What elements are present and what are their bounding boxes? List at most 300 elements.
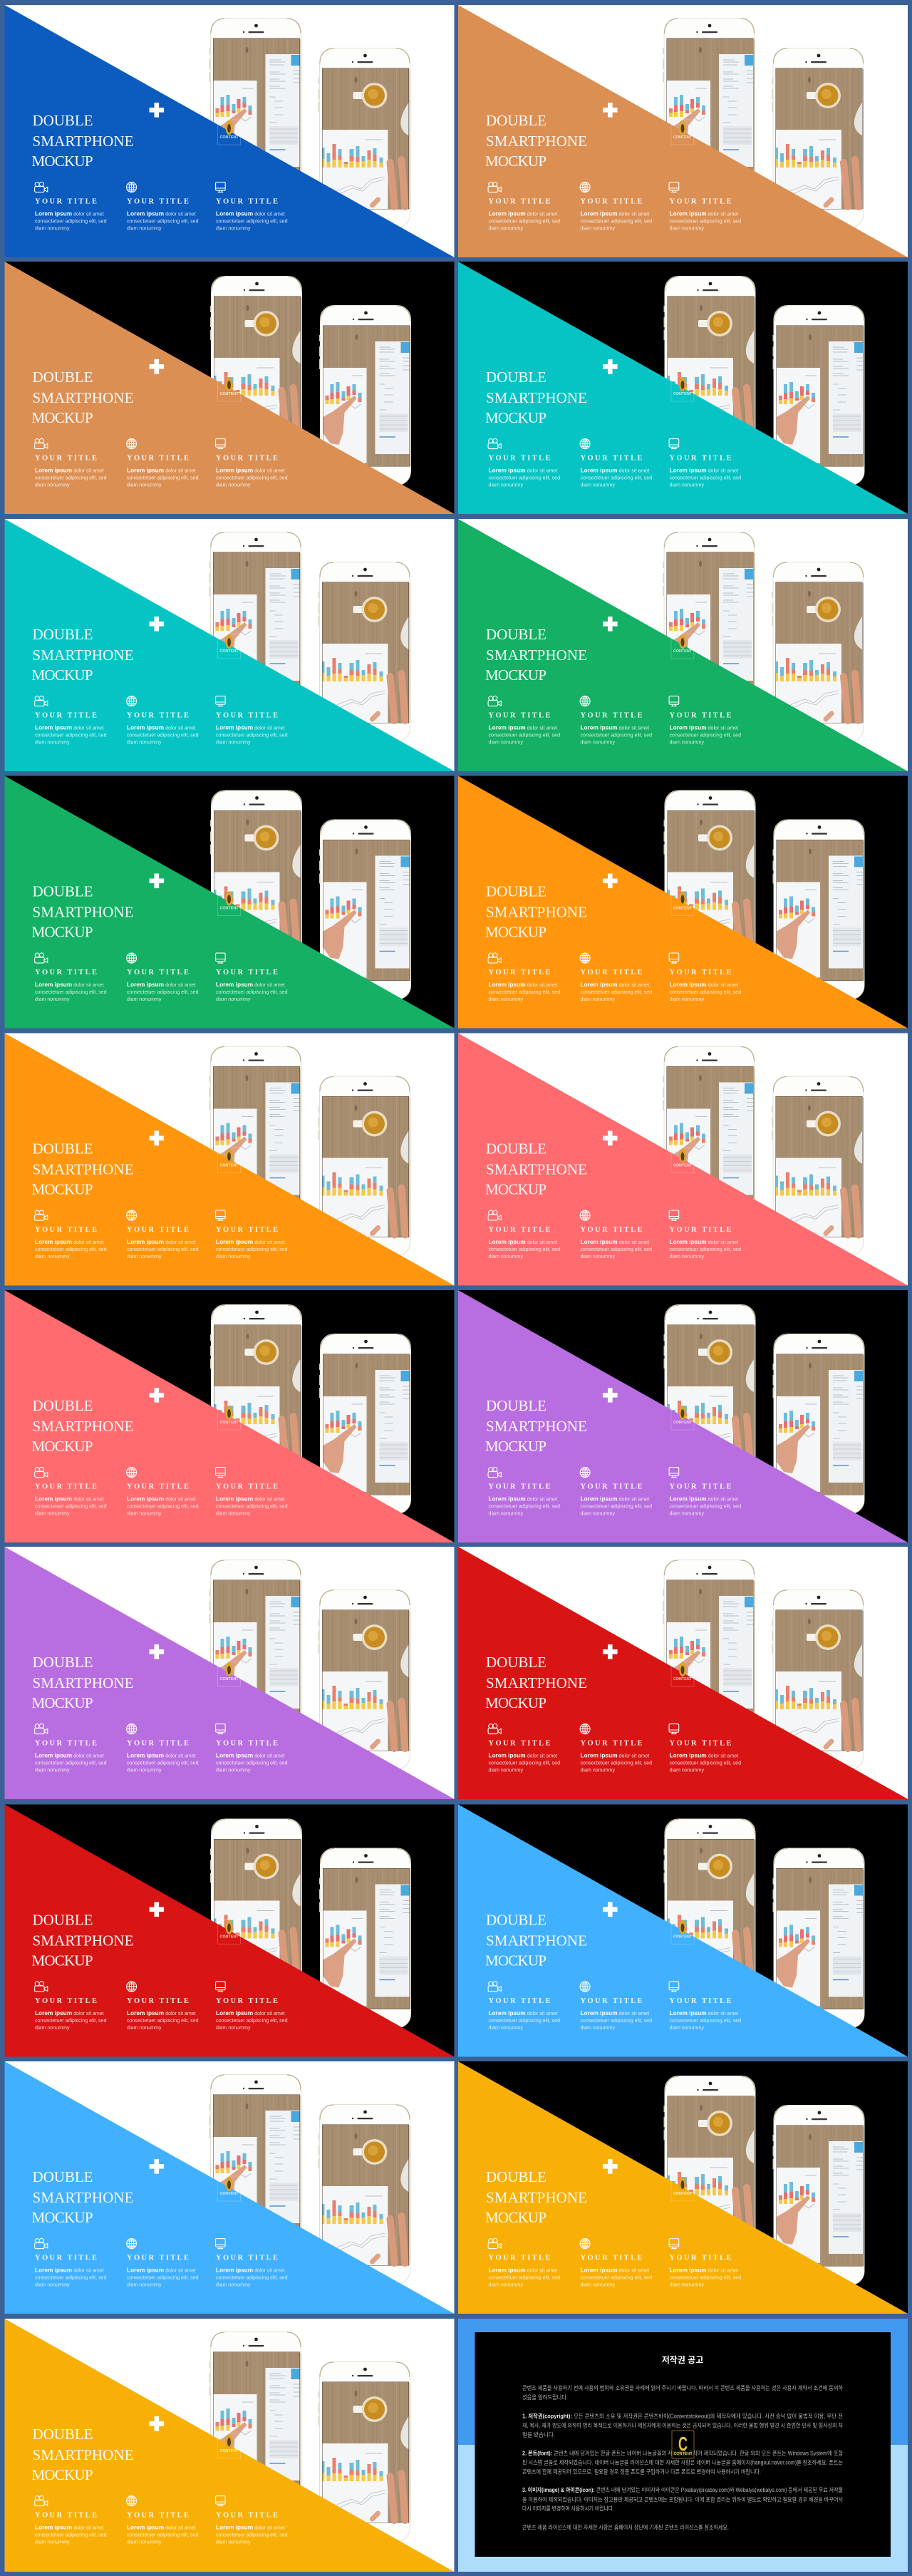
title: SMARTPHONE <box>486 1932 587 1949</box>
feature text: consectetuer adipiscing elit, sed <box>35 989 107 995</box>
icon: plus <box>603 103 618 118</box>
feature title: YOUR TITLE <box>127 1739 190 1748</box>
feature text: Lorem ipsum <box>670 981 707 988</box>
feature title: YOUR TITLE <box>216 2512 279 2519</box>
icon: plus <box>603 1130 618 1145</box>
feature text: dolor sit amet <box>708 211 738 217</box>
feature 1 <box>488 696 560 746</box>
feature text: consectetuer adipiscing elit, sed <box>489 1504 560 1510</box>
notice footer: 콘텐츠 제품 라이선스에 대한 자세한 사항은 홈페이지 상단에 기재된 콘텐츠 라이선스를 참조하세요. <box>522 2523 729 2530</box>
feature text: Lorem ipsum <box>216 2009 253 2016</box>
notice item 3: 다시 이미지를 변경하여 사용하시기 바랍니다. <box>522 2505 614 2512</box>
feature text: consectetuer adipiscing elit, sed <box>580 1504 652 1510</box>
feature text: dolor sit amet <box>165 2011 196 2016</box>
diagonal colour panel <box>458 519 908 771</box>
feature 3 <box>669 696 741 746</box>
watermark logo <box>218 1405 241 1430</box>
icon: globe <box>580 182 590 192</box>
watermark logo <box>218 1919 241 1944</box>
title: DOUBLE <box>33 626 93 643</box>
feature text: Lorem ipsum <box>670 210 707 217</box>
feature text: dolor sit amet <box>527 468 557 473</box>
icon: globe <box>127 1468 137 1478</box>
feature text: dolor sit amet <box>619 726 649 731</box>
diagonal colour panel <box>4 1290 455 1542</box>
feature text: dolor sit amet <box>73 1497 104 1503</box>
feature 1 <box>488 1724 560 1773</box>
feature 3 <box>216 1468 288 1517</box>
feature text: Lorem ipsum <box>489 1752 526 1759</box>
title: MOCKUP <box>485 1438 546 1455</box>
watermark logo: CONTENT <box>673 1934 693 1939</box>
feature text: diam nonummy <box>127 2282 162 2288</box>
title <box>485 1140 587 1197</box>
feature title: YOUR TITLE <box>580 1739 644 1748</box>
feature 1 <box>35 1467 107 1517</box>
black notice panel <box>475 2332 891 2557</box>
slide background <box>4 2319 455 2572</box>
title <box>31 2426 134 2483</box>
slide: red on white <box>458 1547 908 1799</box>
feature text: Lorem ipsum <box>127 2523 164 2530</box>
feature text: Lorem ipsum <box>216 466 253 473</box>
feature text: consectetuer adipiscing elit, sed <box>489 733 560 738</box>
icon: plus <box>150 2416 164 2431</box>
feature text: dolor sit amet <box>619 2268 649 2274</box>
icon: globe <box>127 696 137 706</box>
feature text: dolor sit amet <box>254 982 285 988</box>
title: MOCKUP <box>31 1180 93 1197</box>
icon: plus <box>603 1902 618 1917</box>
icon: monitor <box>216 1982 225 1992</box>
title: SMARTPHONE <box>486 646 587 664</box>
icon: monitor <box>669 1210 679 1220</box>
feature text: dolor sit amet <box>165 211 196 217</box>
feature text: consectetuer adipiscing elit, sed <box>580 218 652 224</box>
title <box>485 112 587 170</box>
feature 2 <box>127 953 199 1002</box>
icon: plus <box>603 874 618 888</box>
feature text: consectetuer adipiscing elit, sed <box>216 475 288 480</box>
feature title: YOUR TITLE <box>216 455 279 462</box>
feature title: YOUR TITLE <box>489 1739 552 1748</box>
feature text: consectetuer adipiscing elit, sed <box>216 2018 288 2024</box>
feature text: diam nonummy <box>127 1254 162 1259</box>
feature text: dolor sit amet <box>165 982 196 988</box>
feature 2 <box>580 696 652 746</box>
notice heading: 저작권 공고 <box>662 2354 703 2365</box>
feature 2 <box>580 1468 652 1517</box>
feature 3 <box>216 2496 288 2545</box>
feature 2 <box>580 182 652 231</box>
feature text: Lorem ipsum <box>216 210 253 217</box>
feature text: diam nonummy <box>580 2025 615 2031</box>
feature text: Lorem ipsum <box>216 1752 253 1759</box>
slide: orange on white <box>458 5 908 257</box>
title <box>485 1397 587 1455</box>
title: MOCKUP <box>485 153 546 170</box>
feature text: dolor sit amet <box>708 1753 738 1759</box>
feature text: diam nonummy <box>127 740 162 746</box>
feature 1 <box>35 2238 107 2288</box>
icon: globe <box>127 1210 137 1220</box>
title: SMARTPHONE <box>33 1418 134 1435</box>
title: DOUBLE <box>486 1140 546 1158</box>
feature title: YOUR TITLE <box>127 1997 190 2005</box>
icon: globe <box>580 439 590 449</box>
watermark logo: CONTENT <box>673 2192 693 2196</box>
title: SMARTPHONE <box>33 1932 134 1949</box>
feature 1 <box>35 1724 107 1773</box>
title: DOUBLE <box>33 2426 93 2443</box>
watermark logo <box>218 376 241 401</box>
title: DOUBLE <box>33 882 93 900</box>
feature text: dolor sit amet <box>165 1753 196 1759</box>
feature text: Lorem ipsum <box>216 2523 253 2530</box>
title: SMARTPHONE <box>486 1160 587 1178</box>
feature text: diam nonummy <box>216 2282 251 2288</box>
feature text: Lorem ipsum <box>127 981 164 988</box>
phones mockup <box>663 1560 864 1769</box>
title: MOCKUP <box>485 924 546 941</box>
feature text: diam nonummy <box>670 740 704 746</box>
slide background <box>4 5 455 257</box>
feature text: Lorem ipsum <box>670 466 707 473</box>
title <box>485 2168 587 2226</box>
background upper band <box>458 2319 908 2445</box>
icon: globe <box>127 182 137 192</box>
title <box>31 882 134 941</box>
feature text: dolor sit amet <box>73 726 104 731</box>
watermark logo <box>671 1405 694 1430</box>
feature text: Lorem ipsum <box>670 2009 707 2016</box>
feature title: YOUR TITLE <box>127 2512 190 2519</box>
feature text: diam nonummy <box>216 1511 251 1517</box>
title <box>485 1654 587 1711</box>
feature text: consectetuer adipiscing elit, sed <box>35 1761 107 1766</box>
slide: purple on black <box>458 1290 908 1542</box>
slide: yellow on black <box>458 2061 908 2314</box>
feature text: Lorem ipsum <box>580 2009 618 2016</box>
feature text: consectetuer adipiscing elit, sed <box>35 475 107 480</box>
feature text: consectetuer adipiscing elit, sed <box>670 1504 741 1510</box>
feature title: YOUR TITLE <box>489 711 552 720</box>
title: SMARTPHONE <box>486 904 587 921</box>
feature text: consectetuer adipiscing elit, sed <box>489 1247 560 1252</box>
feature text: Lorem ipsum <box>35 2009 72 2016</box>
feature text: Lorem ipsum <box>35 466 72 473</box>
feature text: dolor sit amet <box>619 211 649 217</box>
feature title: YOUR TITLE <box>670 455 733 462</box>
phones mockup <box>209 532 410 741</box>
feature text: Lorem ipsum <box>127 210 164 217</box>
slide background <box>4 519 455 771</box>
feature title: YOUR TITLE <box>580 1997 644 2005</box>
icon: monitor <box>216 2496 225 2506</box>
watermark logo: CONTENT <box>673 649 693 654</box>
feature text: diam nonummy <box>127 2025 162 2031</box>
feature text: dolor sit amet <box>254 2268 285 2274</box>
title: DOUBLE <box>486 626 546 643</box>
title: MOCKUP <box>31 1952 93 1969</box>
feature text: consectetuer adipiscing elit, sed <box>580 1247 652 1252</box>
feature title: YOUR TITLE <box>580 969 644 977</box>
feature text: dolor sit amet <box>527 982 557 988</box>
feature 2 <box>580 1724 652 1773</box>
feature text: dolor sit amet <box>527 726 557 731</box>
feature title: YOUR TITLE <box>489 1483 552 1491</box>
icon: video camera <box>35 182 48 192</box>
feature title: YOUR TITLE <box>216 1739 279 1748</box>
feature text: dolor sit amet <box>527 211 557 217</box>
title: MOCKUP <box>485 1952 546 1969</box>
title: SMARTPHONE <box>33 1674 134 1691</box>
notice intro: 셨음을 알려드립니다. <box>522 2394 568 2401</box>
watermark logo: CONTENT <box>219 1421 239 1425</box>
icon: video camera <box>35 2495 48 2506</box>
phones mockup <box>209 1046 410 1256</box>
feature text: diam nonummy <box>35 2539 70 2545</box>
slide background <box>4 1290 455 1542</box>
title: DOUBLE <box>486 1654 546 1671</box>
feature text: dolor sit amet <box>619 468 649 473</box>
watermark logo: CONTENT <box>673 135 693 140</box>
feature text: diam nonummy <box>35 482 70 488</box>
feature text: diam nonummy <box>35 1768 70 1773</box>
slide: teal on black <box>458 262 908 514</box>
background lower band <box>458 2445 908 2572</box>
feature title: YOUR TITLE <box>670 198 733 205</box>
icon: video camera <box>488 2238 501 2249</box>
feature text: Lorem ipsum <box>35 724 72 731</box>
feature title: YOUR TITLE <box>580 1483 644 1491</box>
feature text: diam nonummy <box>670 2025 704 2031</box>
feature text: diam nonummy <box>489 996 523 1002</box>
slide background <box>4 1805 455 2057</box>
feature text: dolor sit amet <box>708 2268 738 2274</box>
title: SMARTPHONE <box>33 2446 134 2463</box>
feature text: diam nonummy <box>580 225 615 231</box>
feature text: Lorem ipsum <box>216 1238 253 1245</box>
watermark logo: CONTENT <box>673 907 693 911</box>
feature text: diam nonummy <box>127 482 162 488</box>
feature text: diam nonummy <box>670 2282 704 2288</box>
diagonal colour panel <box>458 1805 908 2057</box>
feature title: YOUR TITLE <box>216 969 279 977</box>
feature 1 <box>35 953 107 1002</box>
icon: monitor <box>216 953 225 963</box>
slide background <box>4 262 455 514</box>
feature 3 <box>669 1982 741 2031</box>
phones mockup <box>663 1046 864 1256</box>
feature 2 <box>580 953 652 1002</box>
diagonal colour panel <box>4 776 455 1028</box>
slide: salmon on white <box>458 1034 908 1286</box>
slide: bright orange on black <box>458 776 908 1028</box>
phones mockup <box>209 19 410 228</box>
title: MOCKUP <box>31 409 93 426</box>
feature text: Lorem ipsum <box>489 2009 526 2016</box>
feature title: YOUR TITLE <box>35 1739 98 1748</box>
phones mockup <box>209 2332 410 2542</box>
icon: video camera <box>35 1724 48 1734</box>
feature text: consectetuer adipiscing elit, sed <box>670 1761 741 1766</box>
feature title: YOUR TITLE <box>216 2254 279 2262</box>
feature text: consectetuer adipiscing elit, sed <box>35 2532 107 2538</box>
feature text: consectetuer adipiscing elit, sed <box>35 1247 107 1252</box>
phones mockup <box>210 1819 410 2028</box>
feature text: diam nonummy <box>127 225 162 231</box>
feature 1 <box>35 1982 107 2031</box>
feature text: dolor sit amet <box>254 1240 285 1245</box>
icon: globe <box>580 1724 590 1734</box>
diagonal colour panel <box>458 2061 908 2314</box>
title: DOUBLE <box>33 1912 93 1929</box>
slide background <box>458 5 908 257</box>
icon: globe <box>127 1982 137 1992</box>
feature text: diam nonummy <box>489 1254 523 1259</box>
feature title: YOUR TITLE <box>127 1226 190 1234</box>
slide: sky blue on black <box>458 1805 908 2057</box>
title: SMARTPHONE <box>33 1160 134 1178</box>
feature text: dolor sit amet <box>619 1240 649 1245</box>
feature text: consectetuer adipiscing elit, sed <box>216 1504 288 1510</box>
slide: yellow on white <box>4 2319 455 2572</box>
feature text: Lorem ipsum <box>670 1238 707 1245</box>
feature 2 <box>127 1982 199 2031</box>
feature text: consectetuer adipiscing elit, sed <box>580 475 652 480</box>
icon: plus <box>150 1902 164 1917</box>
title <box>31 626 134 684</box>
feature text: Lorem ipsum <box>670 1752 707 1759</box>
diagonal colour panel <box>458 776 908 1028</box>
icon: globe <box>127 439 137 449</box>
icon: monitor <box>216 1210 225 1220</box>
feature text: Lorem ipsum <box>127 2267 164 2274</box>
feature text: Lorem ipsum <box>580 466 618 473</box>
watermark logo: CONTENT <box>219 1163 239 1168</box>
feature text: consectetuer adipiscing elit, sed <box>127 1761 199 1766</box>
title: MOCKUP <box>485 2209 546 2226</box>
feature text: Lorem ipsum <box>580 1495 618 1503</box>
feature 2 <box>127 182 199 231</box>
feature text: Lorem ipsum <box>670 2267 707 2274</box>
icon: monitor <box>669 1982 679 1992</box>
feature text: dolor sit amet <box>619 1497 649 1503</box>
title <box>485 626 587 684</box>
slide background <box>458 1805 908 2057</box>
feature title: YOUR TITLE <box>489 1997 552 2005</box>
feature text: diam nonummy <box>35 996 70 1002</box>
feature text: Lorem ipsum <box>216 981 253 988</box>
feature text: Lorem ipsum <box>670 724 707 731</box>
feature text: consectetuer adipiscing elit, sed <box>35 733 107 738</box>
feature title: YOUR TITLE <box>127 2254 190 2262</box>
feature text: dolor sit amet <box>708 1497 738 1503</box>
title: DOUBLE <box>486 2168 546 2185</box>
watermark logo: CONTENT <box>219 649 239 654</box>
notice item 3: 3. 이미지(image) & 아이콘(icon): 콘텐츠 내에 담겨있는 이미지와 아이콘은 Pixabay(pixabay.com)와 Webalys(webalys.com) 등에서 제공된 무료 저작물 <box>522 2486 843 2493</box>
phones mockup <box>664 1304 864 1514</box>
slide: sky blue on white <box>4 2061 455 2314</box>
feature text: consectetuer adipiscing elit, sed <box>216 989 288 995</box>
icon: video camera <box>35 438 48 449</box>
feature text: Lorem ipsum <box>489 466 526 473</box>
feature text: dolor sit amet <box>527 1240 557 1245</box>
feature text: Lorem ipsum <box>580 2267 618 2274</box>
notice item 1: 벌을 받습니다. <box>522 2431 555 2438</box>
feature text: Lorem ipsum <box>670 1495 707 1503</box>
watermark logo: CONTENT <box>673 392 693 396</box>
phones mockup <box>663 532 864 741</box>
diagonal colour panel <box>458 1290 908 1542</box>
notice item 1: 재, 복사, 재가 양도에 의하여 영리 목적으로 이용하거나 제삼자에게 이용하는 것은 금지되어 있습니다. 이러한 불법 행위 발견 시 준엄한 민사 및 형사상의 처 <box>522 2422 843 2429</box>
feature title: YOUR TITLE <box>670 1739 733 1748</box>
watermark logo <box>672 2431 694 2458</box>
feature title: YOUR TITLE <box>127 455 190 462</box>
slide: red on black <box>4 1805 455 2057</box>
feature text: dolor sit amet <box>73 468 104 473</box>
title: SMARTPHONE <box>486 133 587 150</box>
diagonal colour panel <box>458 1034 908 1286</box>
feature 1 <box>488 182 560 231</box>
feature text: diam nonummy <box>216 225 251 231</box>
feature text: Lorem ipsum <box>489 724 526 731</box>
watermark logo <box>671 1919 694 1944</box>
feature text: diam nonummy <box>489 2025 523 2031</box>
icon: globe <box>580 1982 590 1992</box>
icon: video camera <box>35 2238 48 2249</box>
watermark logo: CONTENT <box>219 135 239 140</box>
phones mockup <box>210 277 410 485</box>
slide background <box>4 776 455 1028</box>
feature text: consectetuer adipiscing elit, sed <box>127 989 199 995</box>
notice intro <box>522 2384 844 2401</box>
feature text: diam nonummy <box>670 1254 704 1259</box>
feature 2 <box>127 439 199 488</box>
feature text: consectetuer adipiscing elit, sed <box>216 733 288 738</box>
diagonal colour panel <box>4 1547 455 1799</box>
feature text: diam nonummy <box>580 1511 615 1517</box>
feature text: diam nonummy <box>580 482 615 488</box>
feature text: diam nonummy <box>35 1511 70 1517</box>
feature text: Lorem ipsum <box>580 981 618 988</box>
watermark logo: CONTENT <box>673 1421 693 1425</box>
feature text: consectetuer adipiscing elit, sed <box>670 475 741 480</box>
watermark logo <box>671 1661 694 1686</box>
feature text: dolor sit amet <box>254 211 285 217</box>
watermark logo: CONTENT <box>673 2452 693 2456</box>
feature text: consectetuer adipiscing elit, sed <box>35 2275 107 2281</box>
feature text: Lorem ipsum <box>489 981 526 988</box>
feature title: YOUR TITLE <box>216 711 279 720</box>
title: MOCKUP <box>31 1438 93 1455</box>
feature text: dolor sit amet <box>708 468 738 473</box>
feature text: Lorem ipsum <box>35 981 72 988</box>
icon: globe <box>580 953 590 963</box>
feature 3 <box>216 696 288 746</box>
feature text: diam nonummy <box>489 225 523 231</box>
feature 1 <box>488 1210 560 1259</box>
title <box>485 1912 587 1969</box>
feature text: dolor sit amet <box>254 1497 285 1503</box>
diagonal colour panel <box>4 2319 455 2572</box>
feature title: YOUR TITLE <box>670 969 733 977</box>
feature title: YOUR TITLE <box>580 455 644 462</box>
phones mockup <box>210 790 410 999</box>
phones mockup <box>664 277 864 485</box>
icon: globe <box>580 2239 590 2249</box>
